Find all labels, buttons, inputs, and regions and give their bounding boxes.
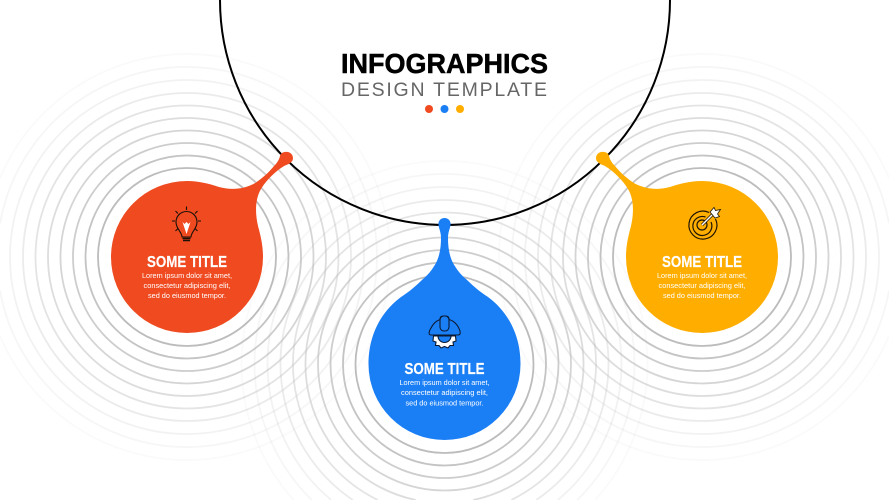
panel: centre blue drop [368,218,520,440]
title: INFOGRAPHICS [341,48,548,79]
concentric rings: centre [242,161,648,500]
panel: right yellow drop [596,152,778,333]
heading: SOME TITLE [404,361,484,378]
body text [142,271,232,300]
icon: helmet and gear [429,316,460,348]
heading: SOME TITLE [147,254,227,271]
drop shape: red [111,152,293,333]
body text [657,271,747,300]
large black arc [220,0,670,225]
heading: SOME TITLE [662,254,742,271]
body text: Lorem ipsum dolor sit amet, [142,271,232,280]
drop shape: yellow [596,152,778,333]
body text [400,378,490,408]
body text: sed do eiusmod tempor. [406,398,484,408]
icon: light bulb [172,206,201,240]
body text: Lorem ipsum dolor sit amet, [400,378,490,387]
panel: left red drop [111,152,293,333]
concentric rings: right [499,54,889,460]
drop shape: blue [368,218,520,440]
subtitle: DESIGN TEMPLATE [341,79,547,101]
body text: Lorem ipsum dolor sit amet, [657,271,747,280]
body text: sed do eiusmod tempor. [148,291,226,300]
concentric rings: left [0,54,390,460]
body text: consectetur adipiscing elit, [658,281,746,290]
icon: target with dart [689,208,720,239]
body text: sed do eiusmod tempor. [663,291,741,300]
colour dots [425,105,464,113]
body text: consectetur adipiscing elit, [144,281,230,290]
title [341,48,548,101]
body text: consectetur adipiscing elit, [401,388,488,397]
